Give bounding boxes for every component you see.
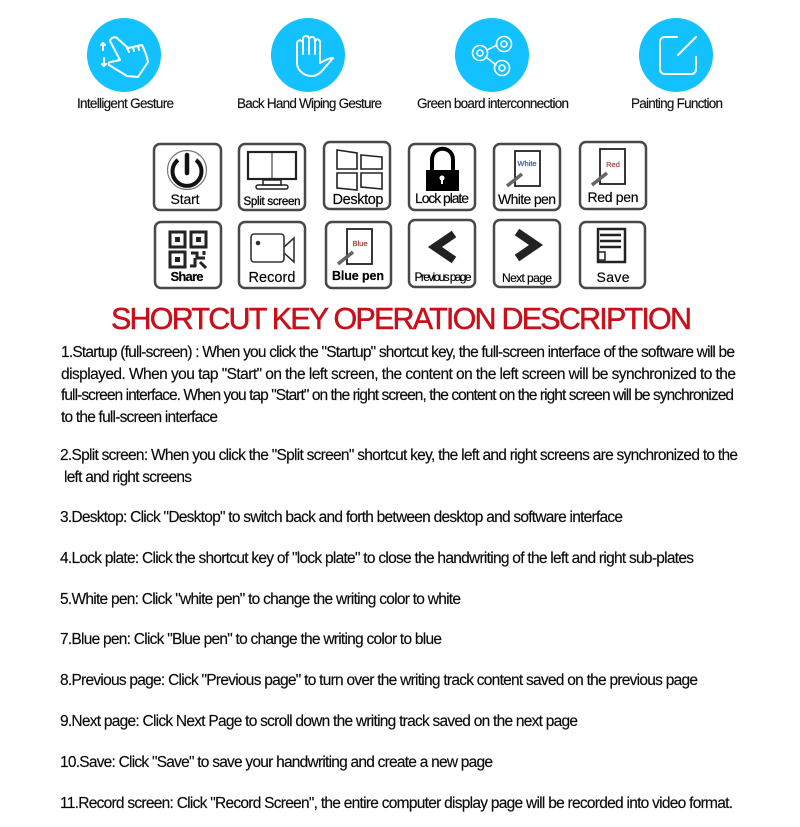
icon: share nodes [472,36,512,76]
label: Split screen [244,196,300,208]
item 1: startup [61,344,736,426]
item 4: lock plate: 4.Lock plate: Click the shortcut key of "lock plate" to close the handwriting of the left and right sub-plates [60,550,694,567]
shortcut key: Red pen [580,142,646,209]
label: Lock plate [415,190,469,206]
shortcut key: Previous page [409,220,475,287]
shortcut key: White pen [494,144,560,210]
shortcut key: Record [239,222,305,288]
item 11: record screen: 11.Record screen: Click "Record Screen", the entire computer display page will be recorded into video format. [60,795,733,812]
label: Save [596,269,630,285]
icon: open hand [297,36,333,76]
icon: window panes [337,150,382,190]
shortcut key: Save [580,222,645,288]
title: SHORTCUT KEY OPERATION DESCRIPTION [111,302,692,336]
caption: Painting Function [631,96,723,111]
shortcut key: Next page [494,220,560,287]
label: Next page [502,271,552,285]
caption: Intelligent Gesture [77,96,174,111]
feature: painting function [631,18,723,111]
label: Red pen [588,189,638,205]
item 5: white pen: 5.White pen: Click "white pen" to change the writing color to white [60,591,461,608]
label: Desktop [332,192,384,208]
item 1: startup: 1.Startup (full-screen) : When you click the "Startup" shortcut key, the full-screen interface of the software will be [61,344,735,361]
shortcut key: Share [155,222,221,288]
item 10: save: 10.Save: Click "Save" to save your handwriting and create a new page [60,754,493,771]
caption: Green board interconnection [417,96,569,111]
feature: intelligent gesture [77,18,174,111]
icon: video camera [251,234,294,262]
item 9: next page: 9.Next page: Click Next Page to scroll down the writing track saved on the next page [60,713,578,730]
item 2: split screen: left and right screens [64,469,192,486]
shortcut key: Desktop [324,142,390,209]
shortcut key: Split screen [239,144,305,210]
icon: tablet with pen: Blue [352,239,368,248]
icon: right chevron [517,232,536,258]
icon: tablet with pen: Red [606,160,620,169]
item 8: previous page: 8.Previous page: Click "Previous page" to turn over the writing track content saved on the previous page [60,672,698,689]
item 7: blue pen: 7.Blue pen: Click "Blue pen" to change the writing color to blue [60,631,442,648]
item 1: startup: to the full-screen interface [61,409,218,426]
label: White pen [498,191,556,207]
label: Share [170,269,204,284]
label: Blue pen [332,269,384,283]
item 3: desktop: 3.Desktop: Click "Desktop" to switch back and forth between desktop and software interface [60,509,623,526]
icon: edit square [660,37,696,74]
item 2: split screen [60,447,738,486]
icon: left chevron [435,234,454,260]
icon: power [168,150,206,190]
description text [60,344,738,812]
label: Start [170,191,200,207]
icon: split monitor [248,152,296,189]
icon: tablet with pen: White [517,159,537,168]
icon: pointing hand [101,37,148,77]
shortcut key: Lock plate [409,144,475,210]
label: Record [248,270,296,286]
icon: QR code [170,232,206,268]
item 2: split screen: 2.Split screen: When you click the "Split screen" shortcut key, the left and right screens are synchronized to the [60,447,738,464]
shortcut key: Start [154,144,221,210]
feature: green board interconnection [417,18,569,111]
shortcut key: Blue pen [326,222,391,288]
item 1: startup: full-screen interface. When you tap "Start" on the right screen, the content on the right screen will be synchronized [61,387,734,404]
icon: padlock [426,149,459,191]
caption: Back Hand Wiping Gesture [237,96,382,111]
item 1: startup: displayed. When you tap "Start" on the left screen, the content on the left screen will be synchronized to the [61,366,736,383]
feature: back hand wiping gesture [237,18,382,111]
label: Previous page [414,270,472,284]
icon: document [598,229,625,262]
